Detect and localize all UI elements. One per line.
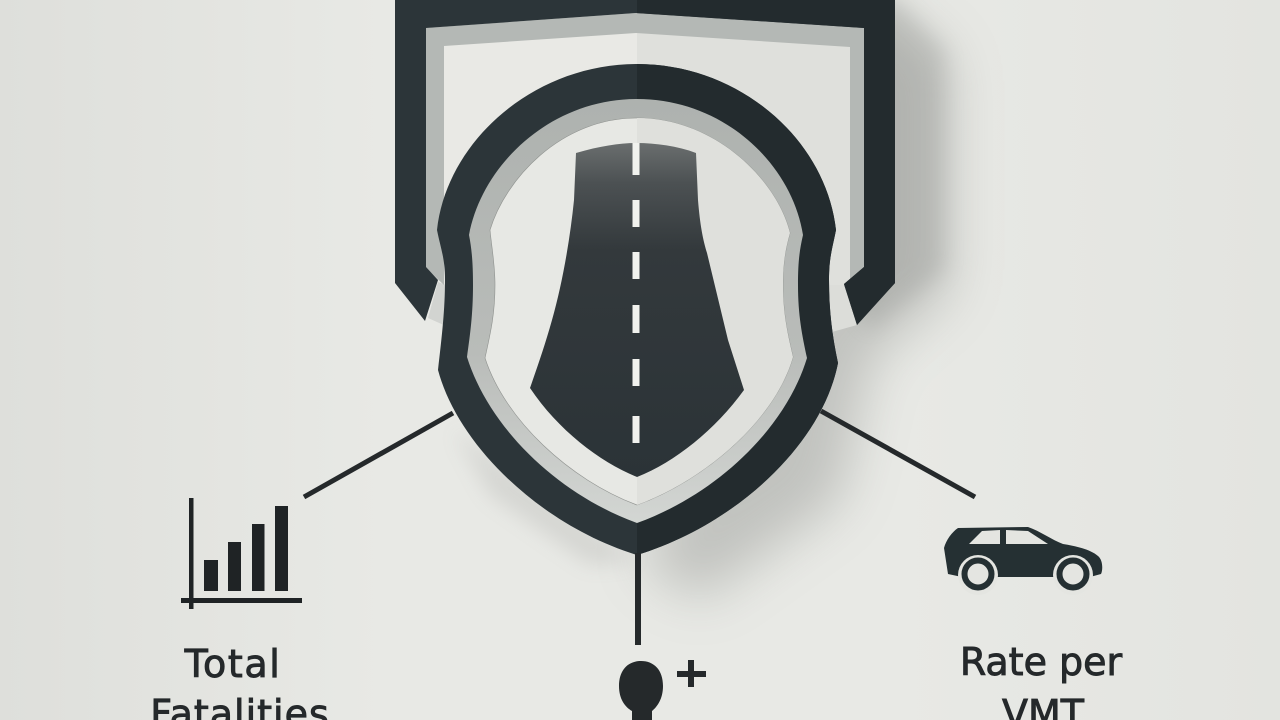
frame inner panel xyxy=(425,13,865,285)
icon: person with plus xyxy=(619,660,706,720)
icon: car xyxy=(944,527,1102,595)
shield drop shadows xyxy=(455,0,950,600)
frame grey bevel xyxy=(425,13,865,285)
label: Rate per VMT xyxy=(960,640,1123,720)
connector: left xyxy=(304,413,453,497)
connector: right xyxy=(821,411,975,497)
label: Total Fatalities xyxy=(150,642,330,720)
frame dark border xyxy=(395,0,895,325)
outer shield frame xyxy=(395,0,895,332)
connector: centre xyxy=(635,553,641,645)
road xyxy=(530,143,744,477)
shield grey bevel xyxy=(467,99,807,523)
shield dark ring xyxy=(437,64,838,555)
label: Rate per VMT: Rate per xyxy=(960,640,1123,684)
frame tail shades xyxy=(428,282,446,326)
inner shield xyxy=(437,64,838,555)
shield light face xyxy=(485,118,793,505)
road centre dashes xyxy=(632,143,640,443)
icon: bar chart xyxy=(181,498,302,609)
label: Total Fatalities: Total xyxy=(184,642,281,686)
